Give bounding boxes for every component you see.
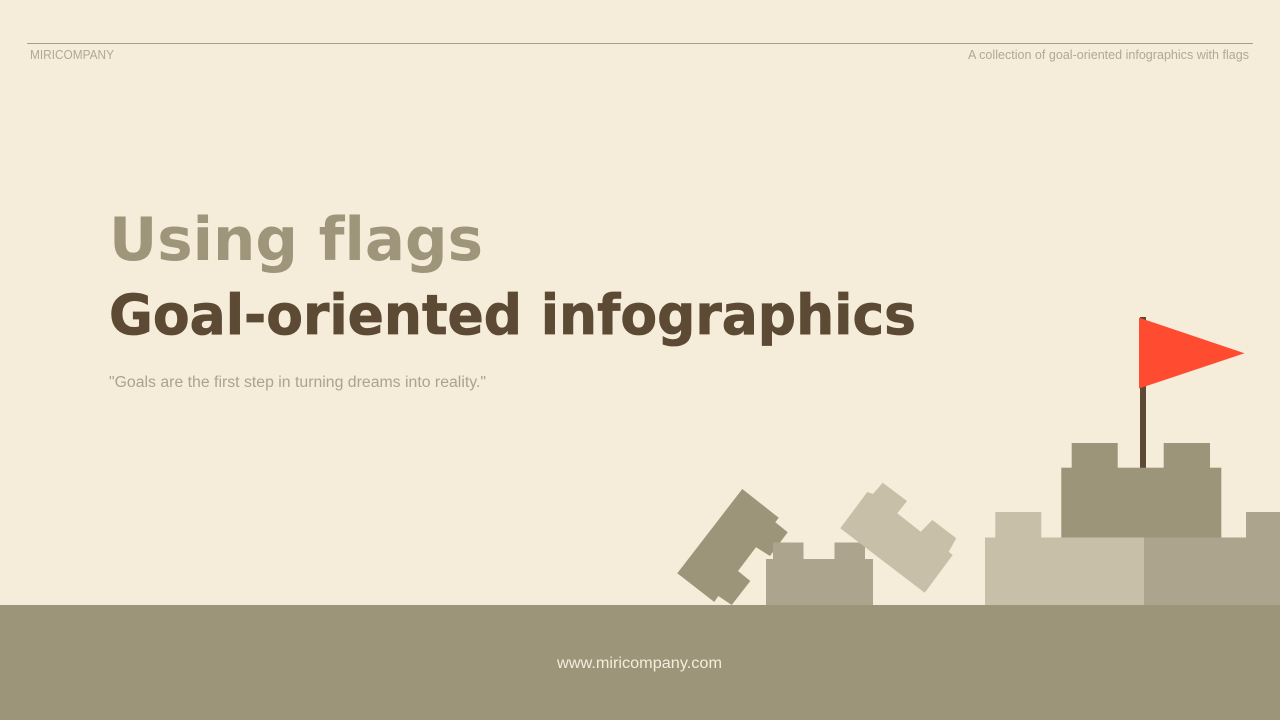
illustration: lower left castle brick <box>985 512 1144 605</box>
illustration: top castle brick <box>1061 443 1221 538</box>
quote text: "Goals are the first step in turning dreams into reality." <box>109 374 486 391</box>
footer website text: www.miricompany.com <box>556 655 722 672</box>
header right: tagline: A collection of goal-oriented infographics with flags <box>968 48 1249 62</box>
title: Using flags: Using flags <box>109 205 483 275</box>
illustration: small center brick <box>766 542 873 605</box>
illustration: flag pole <box>1140 317 1146 468</box>
header left: company name: MIRICOMPANY <box>30 48 115 62</box>
icon: red flag <box>1139 318 1244 388</box>
title: Goal-oriented infographics: Goal-oriented infographics <box>109 283 916 347</box>
footer band <box>0 605 1280 720</box>
illustration: fallen left brick <box>677 489 788 605</box>
illustration: fallen right brick <box>840 483 956 593</box>
illustration: lower right castle brick <box>1144 512 1280 605</box>
